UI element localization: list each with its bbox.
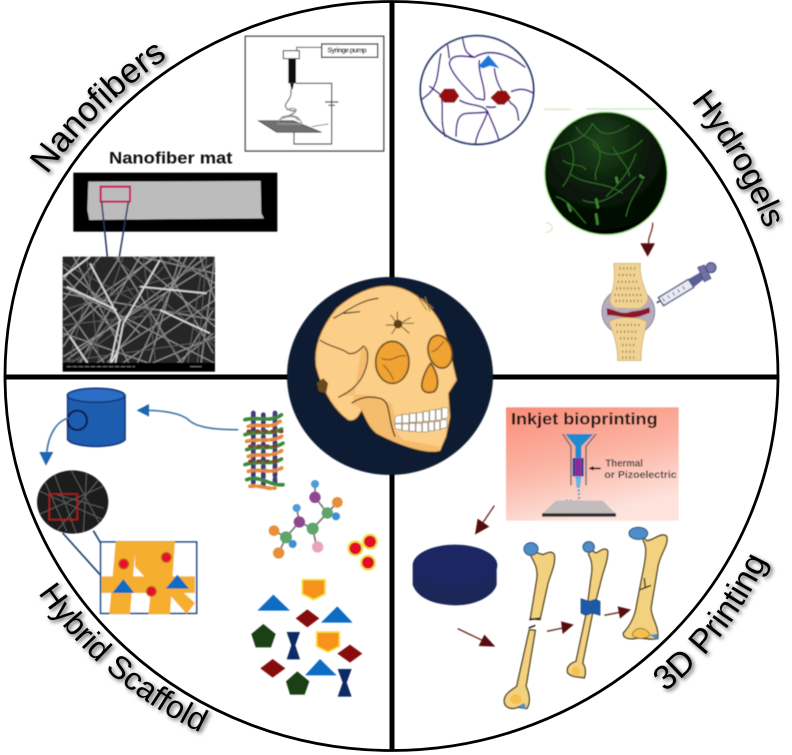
- skull: [316, 286, 457, 452]
- syringe: [657, 263, 716, 306]
- panel: 3D printing: [413, 407, 679, 710]
- inkjet bioprinting diagram: or Pizoelectric: [604, 470, 677, 481]
- center skull emblem: [287, 277, 493, 475]
- scattered growth factor shapes: [251, 580, 362, 697]
- femur with scaffold implant: [567, 542, 608, 678]
- red cells: [348, 535, 377, 570]
- heading: Hybrid Scaffold: Hybrid Scaffold: [40, 582, 213, 736]
- inkjet bioprinting diagram: [506, 407, 679, 521]
- fluorescent hydrogel sphere: [544, 109, 667, 235]
- arrow: disc to bone: [458, 629, 495, 647]
- fiber disc micrograph: [37, 468, 108, 535]
- cylinder scaffold: [67, 388, 125, 446]
- arrow: implant to healed bone: [604, 606, 631, 619]
- DNA helix: [245, 413, 283, 488]
- fractured femur: [504, 543, 555, 710]
- hydrogel polymer network: [420, 36, 534, 144]
- hybrid scaffold close-up: [101, 541, 197, 614]
- SEM micrograph of fibers: [63, 257, 215, 372]
- heading: 3D Printing: 3D Printing: [653, 554, 776, 694]
- inkjet bioprinting diagram: Thermal: [605, 458, 643, 469]
- navy medallion: [287, 277, 493, 475]
- healed femur: [623, 527, 667, 640]
- label: Nanofiber mat: Nanofiber mat: [109, 148, 233, 167]
- arrow: printer to disc: [475, 506, 494, 535]
- printed disc: [413, 545, 497, 605]
- zoom connector lines: [63, 531, 101, 575]
- electrospinning setup diagram: Syringe pump: [327, 48, 367, 55]
- arrow: DNA to cylinder: [137, 404, 238, 430]
- arrow: cylinder to disc: [39, 418, 68, 466]
- inkjet bioprinting diagram: Inkjet bioprinting: [511, 410, 658, 429]
- nanofiber mat photo: [73, 173, 277, 232]
- knee joint: [602, 263, 655, 361]
- arrow: fracture to implant: [547, 621, 574, 634]
- zoom connector lines: [102, 202, 128, 257]
- heading: Hydrogels: Hydrogels: [692, 89, 784, 232]
- arrow: sphere to joint: [640, 223, 655, 257]
- electrospinning setup diagram: [245, 36, 384, 151]
- heading: Nanofibers: Nanofibers: [30, 44, 170, 176]
- molecule: [269, 480, 343, 559]
- panel: nanofibers: [63, 36, 384, 372]
- panel: hydrogels: [420, 36, 716, 361]
- panel: hybrid scaffold: [37, 388, 377, 697]
